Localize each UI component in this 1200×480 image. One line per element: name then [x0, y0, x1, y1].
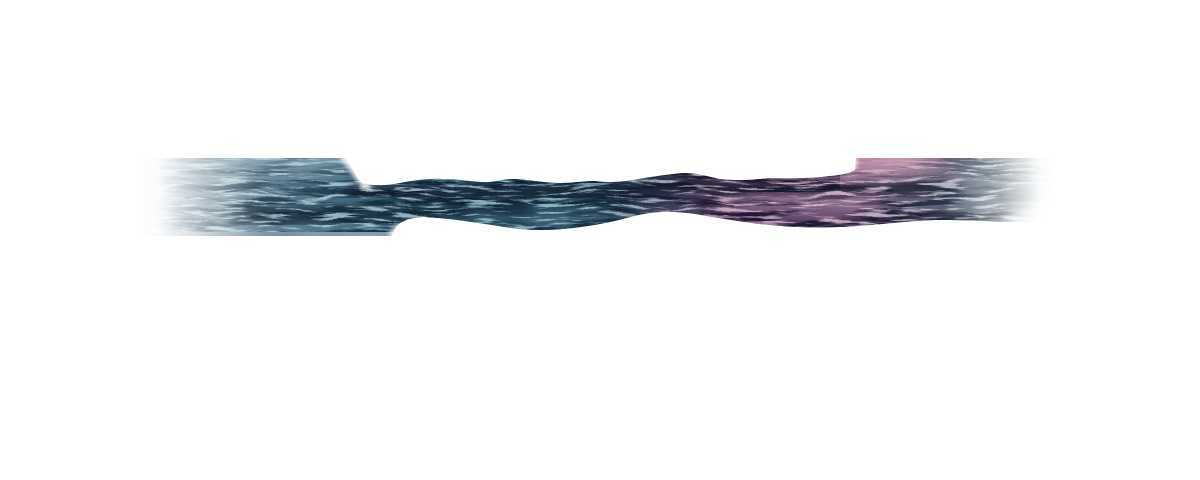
outer white covers — [1068, 150, 1122, 245]
diagonal right fade — [997, 206, 1038, 222]
soft edge at the lower-left step — [388, 225, 404, 240]
bright water highlights — [162, 158, 1037, 236]
soft edge on the left step — [336, 152, 372, 190]
soft dark swells — [345, 186, 960, 192]
soft white patch on the right crest — [825, 158, 857, 173]
ocean wave ribbon image — [158, 158, 1040, 236]
